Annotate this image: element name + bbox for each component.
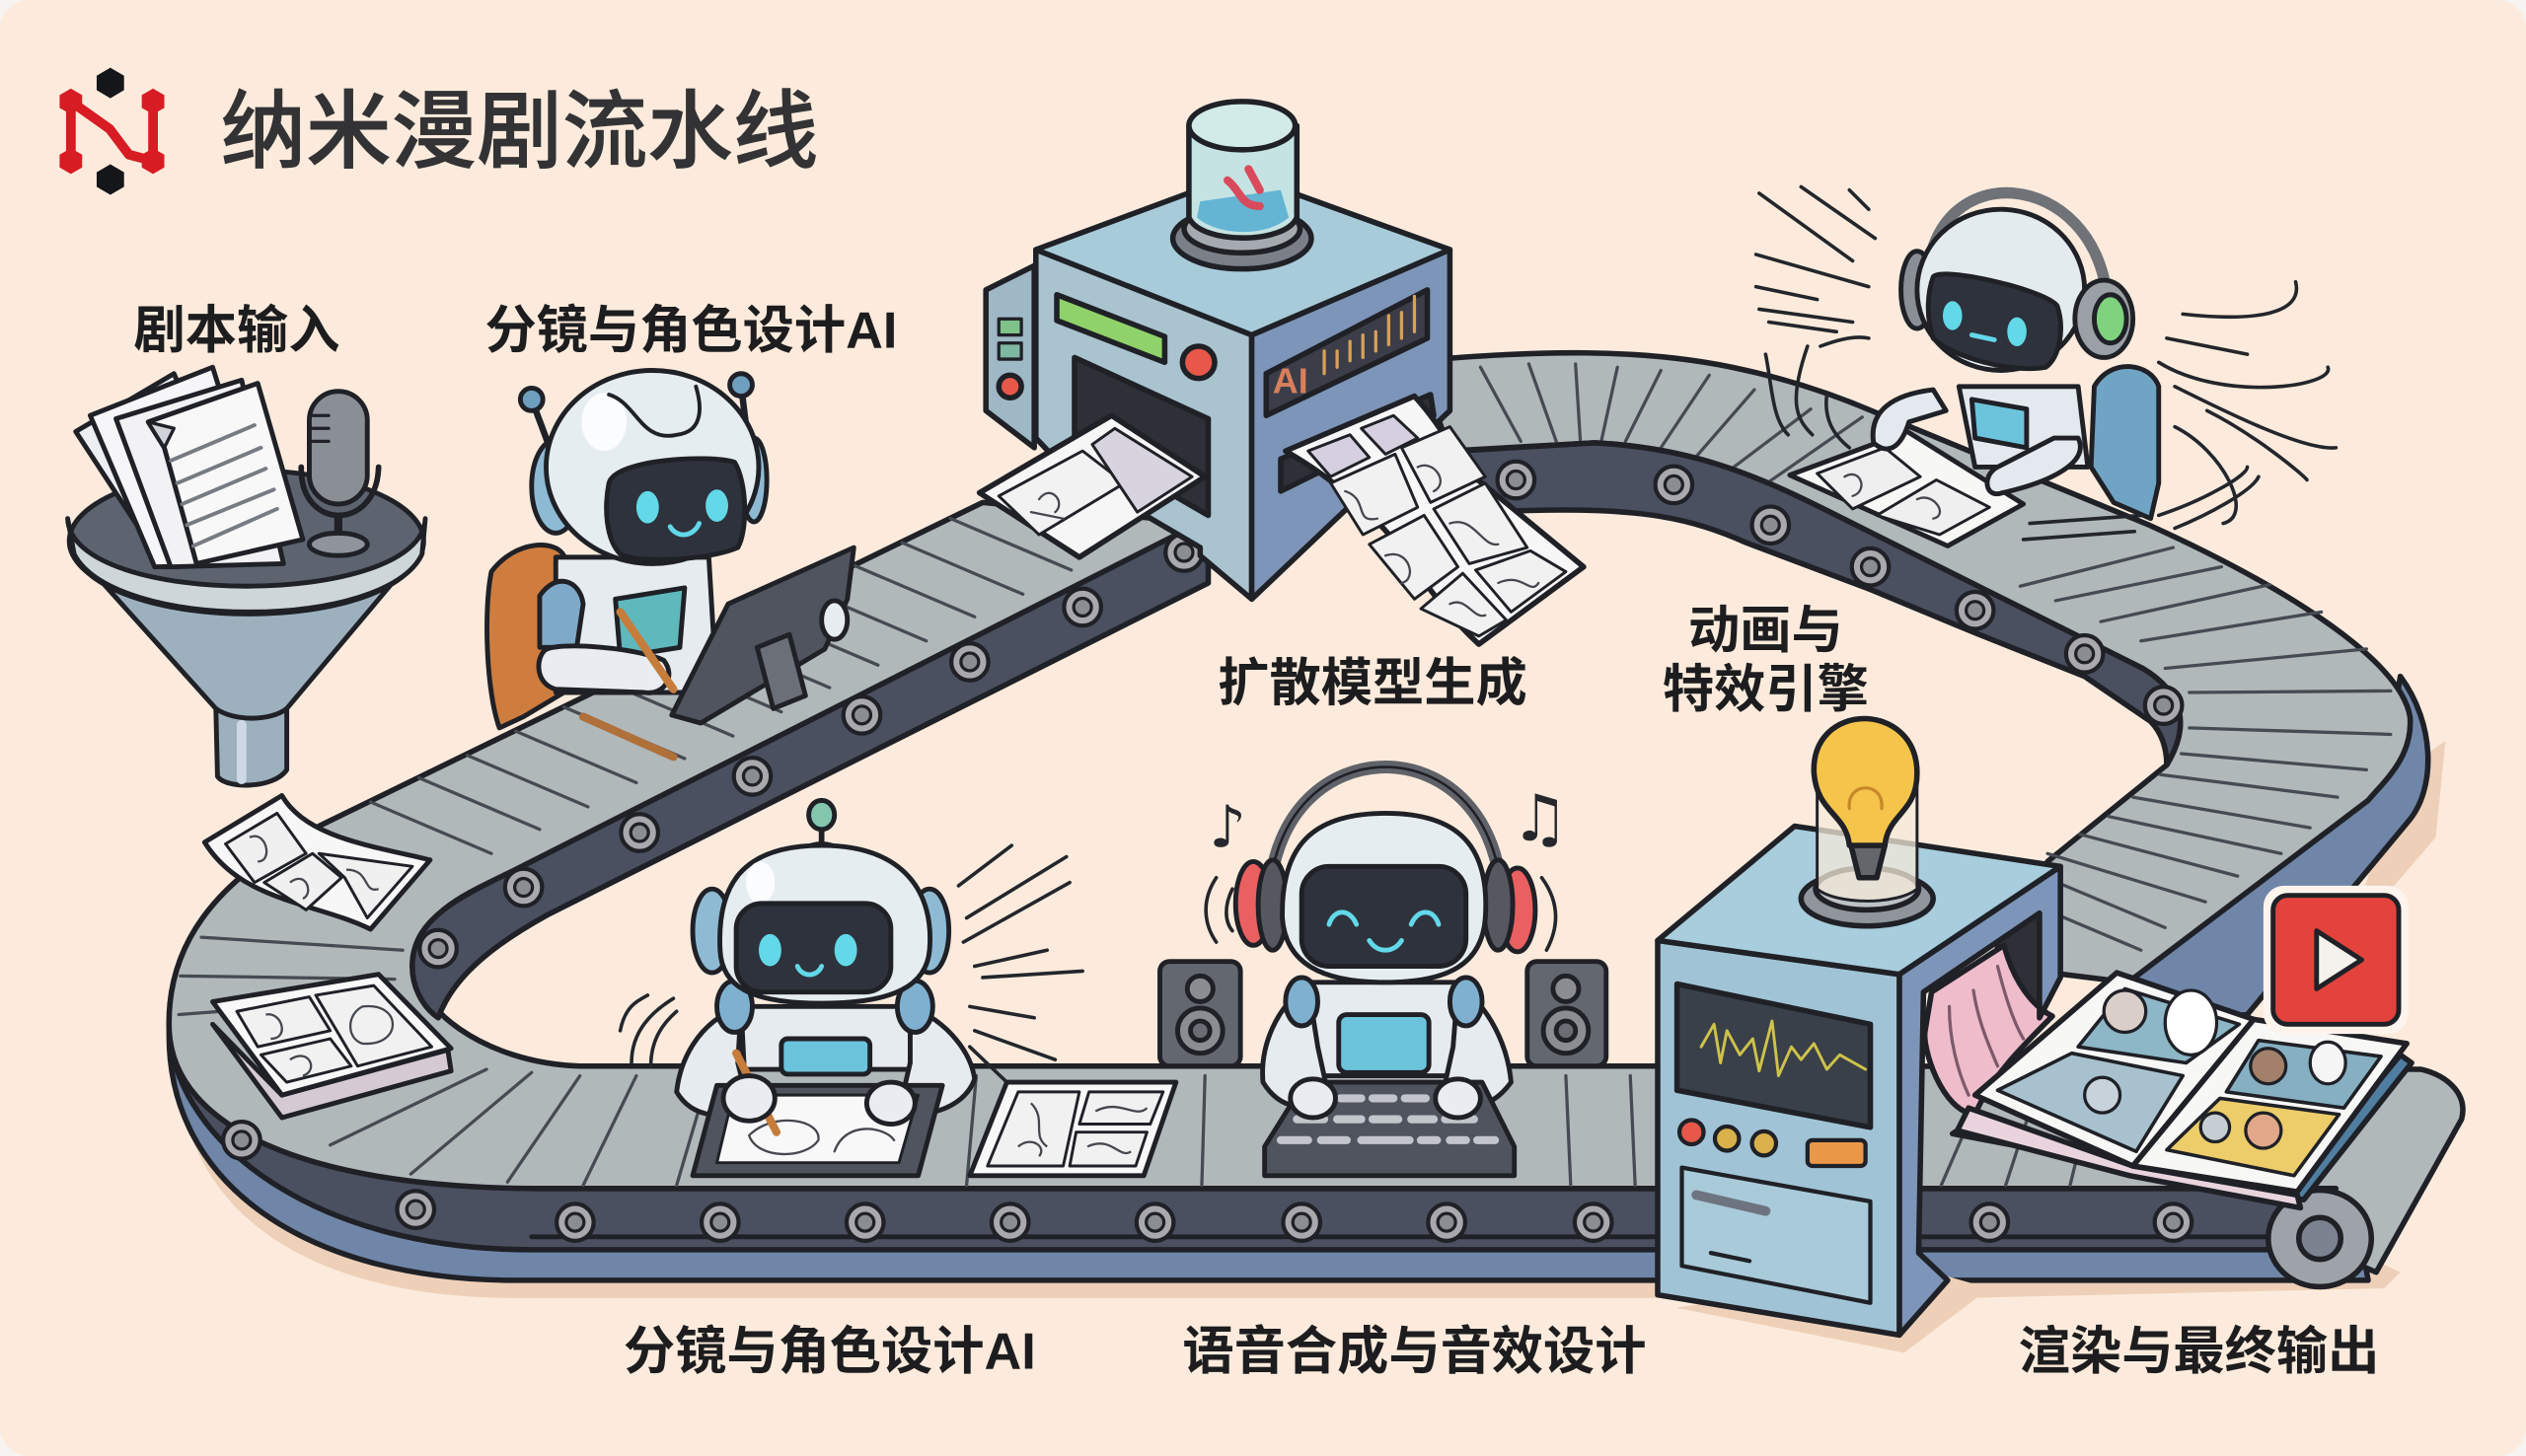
robot: animator with motion lines — [1756, 186, 2336, 546]
lower panel — [1681, 1168, 1871, 1303]
belt right-return inner band — [1458, 443, 2181, 764]
pink output film — [1925, 945, 2052, 1115]
end belt section — [1901, 1066, 2463, 1286]
paper entering machine — [980, 415, 1205, 557]
comic book — [1953, 973, 2412, 1207]
machine side frame — [1899, 866, 2060, 1335]
display with AI meter: AI — [1273, 360, 1308, 400]
loose storyboard sheet on belt — [204, 795, 430, 929]
light bulb jar — [1801, 719, 1933, 926]
belt shadow — [181, 741, 2445, 1298]
belt main stripes — [179, 519, 1635, 1186]
microphone — [301, 392, 379, 555]
storyboard sheets on belt — [970, 1082, 1176, 1176]
machine: diffusion model generator — [980, 102, 1584, 644]
funnel back rim — [69, 471, 423, 612]
control buttons — [1679, 1120, 1866, 1166]
belt lower-left side bands — [169, 1031, 1708, 1280]
storyboard book stack — [213, 975, 451, 1118]
output film strip — [1286, 397, 1584, 644]
funnel body — [68, 519, 425, 785]
machine front faces — [1036, 250, 1252, 599]
belt main surface — [169, 502, 1708, 1189]
label: rendering and output: 渲染与最终输出 — [2019, 1324, 2379, 1381]
title: 纳米漫剧流水线 — [221, 85, 818, 180]
icon: music note: ♪ — [1209, 793, 1246, 861]
robot: tablet designer — [487, 370, 854, 757]
label: animation engine line 1: 动画与 — [1688, 602, 1843, 659]
robot: voice and sound designer — [1206, 767, 1556, 1176]
belt right-return stripes — [1480, 364, 2391, 950]
paper on belt — [1790, 432, 2024, 546]
dark opening — [1997, 913, 2040, 1018]
left page — [1975, 973, 2254, 1166]
right page — [2133, 1019, 2407, 1192]
label: diffusion model generation: 扩散模型生成 — [1218, 655, 1527, 712]
robot: storyboard artist on belt — [621, 800, 1082, 1176]
label: voice and sound: 语音合成与音效设计 — [1182, 1324, 1647, 1381]
belt right-return rollers — [1498, 462, 2182, 724]
script papers — [76, 367, 303, 567]
mixing keyboard — [1265, 1082, 1515, 1176]
conveyor belt — [169, 353, 2463, 1298]
label: script input: 剧本输入 — [134, 303, 339, 360]
icon: video play button — [2268, 891, 2404, 1029]
machine front face — [1658, 940, 1899, 1335]
speaker right — [1527, 962, 1606, 1066]
oscilloscope screen — [1677, 983, 1871, 1128]
label: storyboard AI bottom: 分镜与角色设计AI — [624, 1324, 1036, 1381]
label: animation engine line 2: 特效引擎 — [1663, 662, 1869, 719]
drawing tablet — [693, 1085, 942, 1176]
jar with particles — [1173, 102, 1311, 269]
belt rollers — [223, 534, 1611, 1241]
belt diagonal inner band — [412, 519, 1208, 1018]
speaker left — [1160, 962, 1240, 1066]
machine: renderer — [1658, 719, 2060, 1352]
display with AI meter — [1266, 290, 1428, 415]
belt right-return surface — [1418, 353, 2411, 983]
step 1: funnel with script and microphone — [68, 367, 425, 785]
logo — [59, 68, 165, 195]
belt right-return side — [2094, 677, 2428, 1031]
label: storyboard AI top: 分镜与角色设计AI — [484, 303, 897, 360]
icon: music notes: ♫ — [1512, 781, 1569, 856]
